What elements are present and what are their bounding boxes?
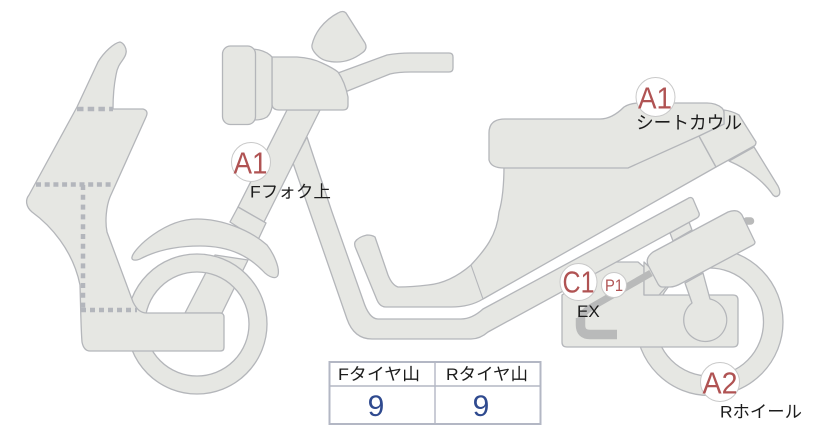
value: front tread: 9: [368, 390, 384, 423]
seat: [489, 103, 724, 168]
front fork upper: [238, 110, 320, 222]
engine block: [562, 262, 738, 347]
body divider: [471, 265, 483, 299]
rear wheel: [636, 248, 783, 396]
badge: A1 seat: A1: [638, 80, 672, 116]
tyre tread table: [330, 362, 540, 424]
label: seat cowl: シートカウル: [636, 113, 742, 133]
value: rear tread: 9: [473, 390, 489, 423]
frame tube: [293, 137, 699, 339]
handlebar cover: [272, 57, 348, 110]
handlebar: [338, 53, 453, 92]
rear tail: [729, 147, 780, 196]
label: rear wheel: Rホイール: [720, 402, 802, 422]
badge: P1: [602, 272, 626, 298]
rear suspension arm and hub: [684, 273, 727, 341]
fork collar: [230, 207, 266, 240]
engine step: [644, 262, 668, 295]
badge: A1 fork: A1: [234, 146, 268, 180]
label: fork: Fフォク上: [250, 182, 331, 202]
label: EX: EX: [577, 302, 600, 321]
header: front tread: Fタイヤ山: [338, 365, 420, 384]
headlight: [222, 46, 256, 124]
badge: C1: C1: [562, 264, 594, 300]
badge: P1: P1: [605, 276, 623, 295]
rear bolt: [746, 217, 750, 225]
front fender: [132, 219, 278, 278]
front fork lower: [185, 255, 248, 313]
shield seams: [36, 109, 137, 312]
front shield: [27, 42, 224, 351]
shock strut: [670, 222, 692, 241]
badge: A2: A2: [702, 366, 738, 400]
front wheel: [127, 254, 267, 394]
exhaust pipe: [580, 273, 651, 334]
headlight rim: [253, 49, 272, 120]
header: rear tread: Rタイヤ山: [446, 365, 528, 384]
seat cowl tail: [699, 110, 756, 167]
under seat body: [355, 136, 716, 307]
mirror: [312, 12, 366, 62]
rear box: [647, 211, 755, 287]
